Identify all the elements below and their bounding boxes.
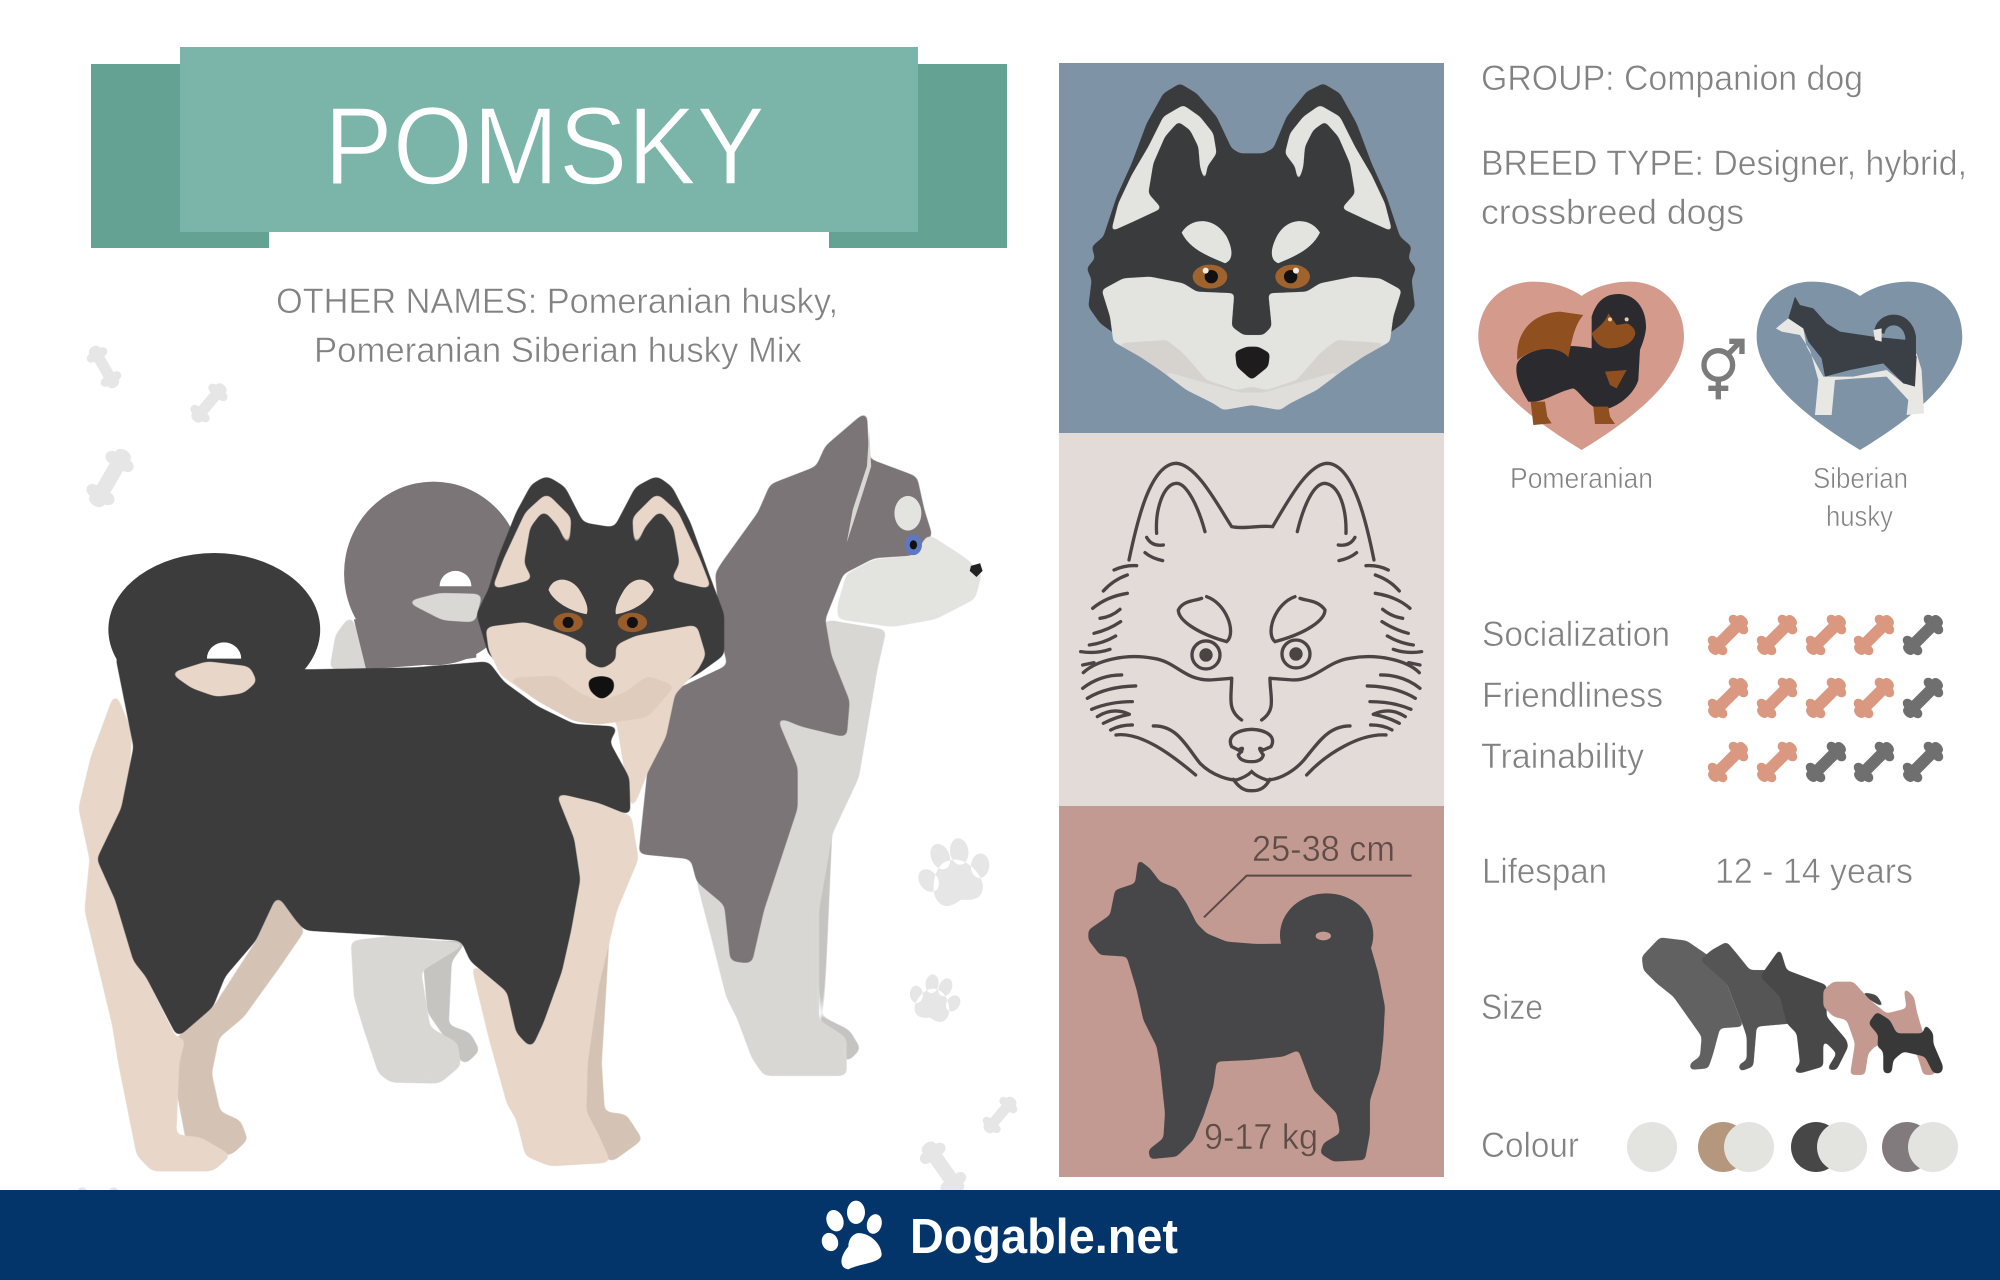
group and breed type — [1481, 59, 1967, 232]
panel: face colour — [1059, 63, 1444, 433]
socialization bones — [1702, 609, 1949, 661]
labels: parent breed names — [1510, 463, 1908, 533]
group and breed type: GROUP: Companion dog — [1481, 59, 1863, 98]
title: POMSKY — [324, 85, 765, 208]
lifespan: Lifespan — [1482, 852, 1607, 891]
logo text: Dogable.net — [910, 1210, 1178, 1264]
labels: parent breed names: Siberian — [1813, 463, 1908, 495]
size: Size — [1481, 988, 1543, 1027]
socialization label: Socialization — [1482, 615, 1670, 654]
trainability label: Trainability — [1481, 737, 1644, 776]
group and breed type: crossbreed dogs — [1481, 193, 1744, 232]
panel: silhouette with measurements — [1059, 806, 1444, 1177]
ratings — [1481, 609, 1949, 788]
icon: paw logo — [819, 1201, 884, 1269]
illustration: three-quarter pomsky dogs — [78, 410, 983, 1171]
dog head — [476, 476, 724, 724]
icon: dog size comparison silhouettes — [1642, 937, 1943, 1075]
group and breed type: BREED TYPE: Designer, hybrid, — [1481, 144, 1967, 183]
friendliness bones — [1702, 672, 1949, 724]
other names — [276, 282, 838, 370]
heart: Pomeranian — [1478, 282, 1684, 450]
labels: parent breed names: Pomeranian — [1510, 463, 1653, 495]
lifespan — [1482, 852, 1913, 891]
back dog: grey husky pose — [329, 410, 983, 1084]
weight label: 9-17 kg — [1204, 1116, 1318, 1157]
icon: line drawing of dog head — [1081, 463, 1422, 791]
heart: Siberian husky — [1757, 282, 1962, 450]
size — [1481, 937, 1943, 1075]
footer band — [0, 1190, 2000, 1280]
front dog: black and tan pomsky — [78, 476, 724, 1171]
other names: OTHER NAMES: Pomeranian husky, — [276, 282, 838, 321]
other names: Pomeranian Siberian husky Mix — [314, 331, 802, 370]
icon: dog head — [1087, 83, 1416, 410]
labels: parent breed names: husky — [1826, 501, 1893, 533]
colour swatches — [1481, 1122, 1958, 1172]
lifespan: 12 - 14 years — [1715, 852, 1913, 891]
panel: line art — [1059, 433, 1444, 806]
icon: dog silhouette — [1088, 859, 1412, 1162]
trainability bones — [1702, 736, 1949, 788]
height label: 25-38 cm — [1252, 828, 1395, 869]
colour swatches: Colour — [1481, 1126, 1579, 1165]
title banner — [91, 47, 1007, 248]
icon: male-female symbol — [1704, 341, 1742, 399]
parent breeds — [1478, 282, 1962, 450]
friendliness label: Friendliness — [1482, 676, 1663, 715]
decorative bones and paws — [72, 341, 1022, 1213]
